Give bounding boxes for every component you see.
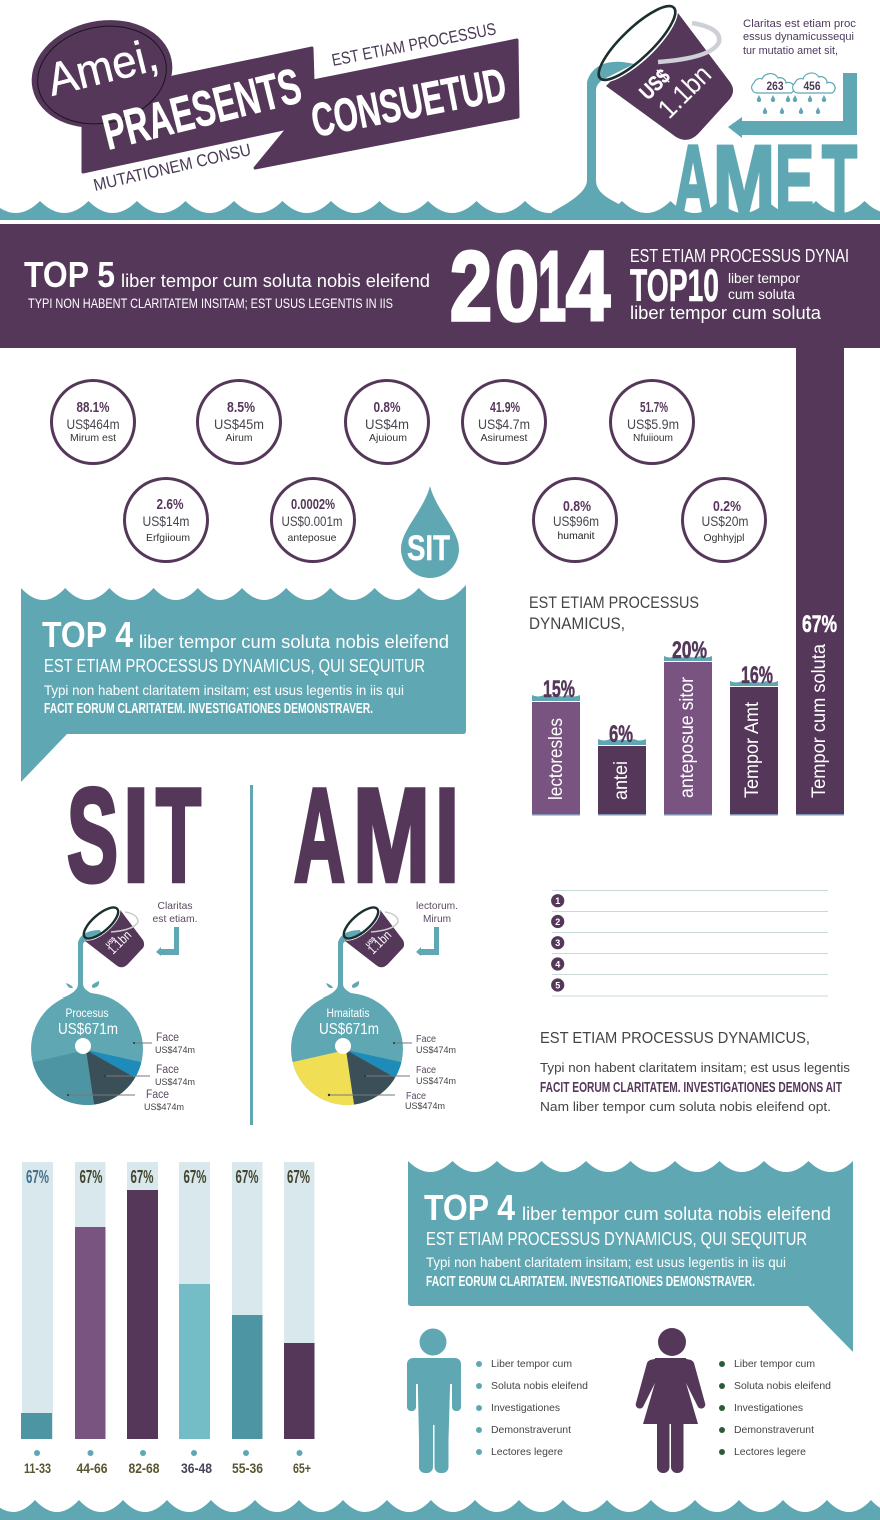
subheading: liber tempor cum soluta nobis eleifend [522,1204,831,1224]
circle: asirumest: Asirumest [480,432,528,444]
item 2 [551,915,564,928]
pie labels: US$474m [144,1102,184,1113]
item 2: 2 [555,917,560,927]
bar: anteposue sitor: 20% [672,637,707,664]
list: man [476,1359,588,1458]
bar: 82-68 [127,1162,160,1476]
heading: sit: I [123,762,149,910]
item 3 [551,936,564,949]
bar: 65+: 67% [287,1167,310,1187]
wave: footer water [0,1500,880,1520]
pie labels: US$474m [155,1045,195,1056]
heading: amet [674,125,857,235]
chart: age bars [21,1162,314,1476]
bar: 44-66: 67% [80,1167,102,1187]
circle: nfuiioum: 51.7% [640,399,668,416]
icon: bucket: 1.1bn [105,927,134,957]
stat circles [52,380,766,562]
circle: humanit: US$96m [553,513,599,529]
pie chart: US$671m [319,1021,379,1038]
bar: tempor amt: 16% [741,662,773,689]
list: woman: Demonstraverunt [734,1425,814,1436]
circle: ajuioum: Ajuioum [369,432,407,444]
circle: airum [198,380,280,464]
circle: erfgiioum: US$14m [142,513,190,529]
chart title [529,594,699,633]
circle: humanit [534,478,616,562]
list: woman: Liber tempor cum [734,1359,815,1370]
icon: rain clouds: 263 [766,79,784,93]
wave: header water [0,201,880,220]
text block: est etiam: Nam liber tempor cum soluta nobis eleifend opt. [540,1099,831,1114]
bar: 36-48: 36-48 [181,1460,212,1476]
item 5: 5 [555,980,560,990]
bar: anteposue sitor [664,637,712,816]
pie labels: US$474m [155,1077,195,1088]
list: man: Soluta nobis eleifend [491,1381,588,1392]
text: tail line: liber tempor cum soluta [630,303,822,323]
bar: lectoresles: lectoresles [545,718,567,800]
text: caps line: TYPI NON HABENT CLARITATEM INSITAM; EST USUS LEGENTIS IN IIS [28,295,393,311]
heading: amet: E [775,125,814,235]
heading: ami: M [353,762,430,910]
circle: ajuioum: US$4m [365,416,409,432]
heading: ami [294,762,459,910]
circle: mirum est: Mirum est [70,432,116,444]
pie labels: Face [416,1065,436,1076]
icon: rain clouds: 456 [804,79,821,93]
panel: top 4 right [408,1161,853,1352]
heading: sit: S [67,762,118,910]
ribbon shape [83,40,518,172]
pie labels: Face [146,1089,169,1101]
circle: anteposue: US$0.001m [282,513,342,529]
text: header note: essus dynamicussequi [743,31,854,43]
bar: antei: antei [610,761,632,800]
pie labels: US$474m [416,1076,456,1087]
icon: bucket [322,899,404,998]
bar: tempor amt: Tempor Amt [741,701,763,798]
note: lectorum [416,900,458,925]
circle: asirumest: 41.9% [490,399,520,416]
circle: mirum est: 88.1% [76,399,110,416]
bar: tempor amt [730,662,778,816]
icon: pouring bucket [552,0,733,216]
panel: sit pie [31,899,198,1113]
icon: bucket: US$ [105,936,118,948]
circle: anteposue: anteposue [288,532,337,544]
heading: TOP 4 [424,1187,515,1228]
bar: 44-66: 44-66 [76,1460,108,1476]
bar: 11-33: 11-33 [24,1460,51,1476]
circle: oghhyjpl: US$20m [702,513,748,529]
circle: anteposue [272,478,354,562]
circle: airum: 8.5% [227,399,255,416]
pie labels: US$474m [405,1101,445,1112]
item 5 [551,978,564,992]
text block: est etiam: EST ETIAM PROCESSUS DYNAMICUS, [540,1030,810,1047]
bar: 65+ [284,1162,314,1476]
heading: year: 4 [566,231,610,341]
caps line: EST ETIAM PROCESSUS DYNAMICUS, QUI SEQUITUR [426,1229,807,1249]
heading: top 5: TOP 5 [24,254,115,295]
speech bubble: Amei, [42,28,163,106]
circle: mirum est [52,380,134,464]
icon: drop with sit [401,486,459,578]
numbered list [551,890,828,996]
arrow: header [728,73,857,138]
circle: oghhyjpl [682,478,766,562]
item 4 [551,957,564,971]
bar: tempor cum soluta: Tempor cum soluta [808,644,830,798]
heading: year [450,231,610,341]
pie chart [31,993,143,1105]
pie labels [405,1034,456,1112]
pie labels: Face [406,1091,426,1102]
bar: lectoresles [532,676,580,816]
chart title: EST ETIAM PROCESSUS [529,594,699,612]
icon: rain clouds [752,73,835,114]
circle: airum: Airum [226,432,253,444]
list: man: Demonstraverunt [491,1425,571,1436]
icon: bucket: US$ [365,936,378,948]
circle: humanit: 0.8% [563,498,591,515]
note: claritas: est etiam. [152,913,198,925]
panel: top 4 left [21,585,466,782]
circle: ajuioum: 0.8% [374,399,400,416]
circle: oghhyjpl: Oghhyjpl [704,532,744,544]
list: man: Liber tempor cum [491,1359,572,1370]
subheading: mutationem: MUTATIONEM CONSU [92,140,253,195]
bar: anteposue sitor: anteposue sitor [676,677,698,798]
bar: 55-36 [232,1162,263,1476]
list: man: Lectores legere [491,1447,563,1458]
bar: 11-33: 67% [26,1167,49,1187]
pie chart [291,993,403,1105]
heading: top 10: TOP10 [630,260,719,311]
pie chart: Procesus [66,1008,109,1020]
icon: drop with sit: SIT [407,529,450,568]
pie labels: US$474m [416,1045,456,1056]
item 1 [551,894,564,907]
caps line: EST ETIAM PROCESSUS DYNAMICUS, QUI SEQUITUR [44,656,425,676]
circle: ajuioum [346,380,428,464]
bar: 55-36: 67% [236,1167,258,1187]
icon: man [407,1328,461,1473]
text block: est etiam: Typi non habent claritatem insitam; est usus legentis [540,1060,851,1075]
heading: amet: A [674,125,712,235]
circle: erfgiioum: Erfgiioum [146,532,190,544]
pie chart: US$671m [58,1021,118,1038]
list: woman [719,1359,831,1458]
text: top 5 subline: liber tempor cum soluta nobis eleifend [121,271,430,291]
icon: bucket: 1.1bn [365,927,394,957]
bar: 44-66 [75,1162,108,1476]
text: top 10 side [728,270,800,302]
body line: Typi non habent claritatem insitam; est usus legentis in iis qui [426,1254,786,1270]
heading: ami: I [435,762,459,910]
icon: pouring bucket: US$ [635,65,675,105]
heading: year: 2 [450,231,492,341]
text: top 10 side: cum soluta [728,286,795,302]
bold line: FACIT EORUM CLARITATEM. INVESTIGATIONES DEMONSTRAVER. [44,700,373,717]
panel: top band [0,224,880,348]
heading: year: 0 [495,231,539,341]
heading: sit [67,762,201,910]
icon: bucket [62,899,144,998]
panel: ami pie [291,899,458,1112]
circle: anteposue: 0.0002% [291,496,335,513]
heading: consuetud: CONSUETUD [307,57,510,147]
text block: est etiam [540,1030,851,1114]
subheading: est etiam: EST ETIAM PROCESSUS [330,19,498,70]
note: claritas: Claritas [158,900,192,912]
item 1: 1 [555,896,560,906]
item 4: 4 [555,959,560,969]
icon: woman [636,1328,705,1473]
note: claritas [152,900,198,925]
chart title: DYNAMICUS, [529,615,625,633]
circle: nfuiioum [610,380,694,464]
list: woman: Soluta nobis eleifend [734,1381,831,1392]
note: lectorum: lectorum. [416,900,458,912]
list: woman: Investigationes [734,1403,803,1414]
pie labels: Face [416,1034,436,1045]
body line: Typi non habent claritatem insitam; est usus legentis in iis qui [44,682,404,698]
bar: 36-48: 67% [184,1167,206,1187]
item 3: 3 [555,938,560,948]
circle: erfgiioum [124,478,208,562]
circle: nfuiioum: US$5.9m [627,416,679,432]
arrow [416,927,439,956]
bar: tempor cum soluta: 67% [802,611,837,638]
bar: 55-36: 55-36 [232,1460,263,1476]
circle: asirumest [462,380,546,464]
bar: lectoresles: 15% [543,676,575,703]
circle: airum: US$45m [214,416,264,432]
circle: nfuiioum: Nfuiioum [633,432,673,444]
heading: year: 1 [538,231,566,341]
bar: 82-68: 82-68 [128,1460,160,1476]
bar: 82-68: 67% [130,1167,154,1187]
text: header note: Claritas est etiam proc [743,18,857,30]
heading: amet: M [713,125,775,235]
chart: est etiam bars [529,348,844,816]
note: lectorum: Mirum [423,913,451,925]
bar: antei [598,721,646,816]
heading: ami: A [294,762,345,910]
pie labels [144,1032,195,1113]
bar: 11-33 [21,1162,53,1476]
text: header note [743,18,857,57]
circle: humanit: humanit [558,530,595,542]
bar: 36-48 [179,1162,212,1476]
leader lines [67,1042,152,1096]
pie labels: Face [156,1064,179,1076]
icon: pouring bucket: 1.1bn [652,59,717,124]
subheading: liber tempor cum soluta nobis eleifend [139,632,449,652]
speech bubble [22,7,182,141]
pie chart: Hmaitatis [326,1008,370,1020]
bar: antei: 6% [609,721,633,748]
circle: mirum est: US$464m [66,416,120,432]
bar: 65+: 65+ [293,1460,311,1476]
bar: tempor cum soluta [796,348,844,816]
text: header note: tur mutatio amet sit, [743,45,838,57]
list: man: Investigationes [491,1403,560,1414]
arrow [156,927,179,956]
heading: TOP 4 [42,614,133,655]
circle: asirumest: US$4.7m [478,416,530,432]
leader lines [328,1042,412,1096]
circle: erfgiioum: 2.6% [156,496,184,513]
heading: sit: T [156,762,201,910]
list: woman: Lectores legere [734,1447,806,1458]
header: title ribbon [22,7,518,195]
text: top 10 side: liber tempor [728,270,800,286]
pie labels: Face [156,1032,179,1044]
heading: praesents: PRAESENTS [97,57,307,161]
circle: oghhyjpl: 0.2% [713,498,741,515]
